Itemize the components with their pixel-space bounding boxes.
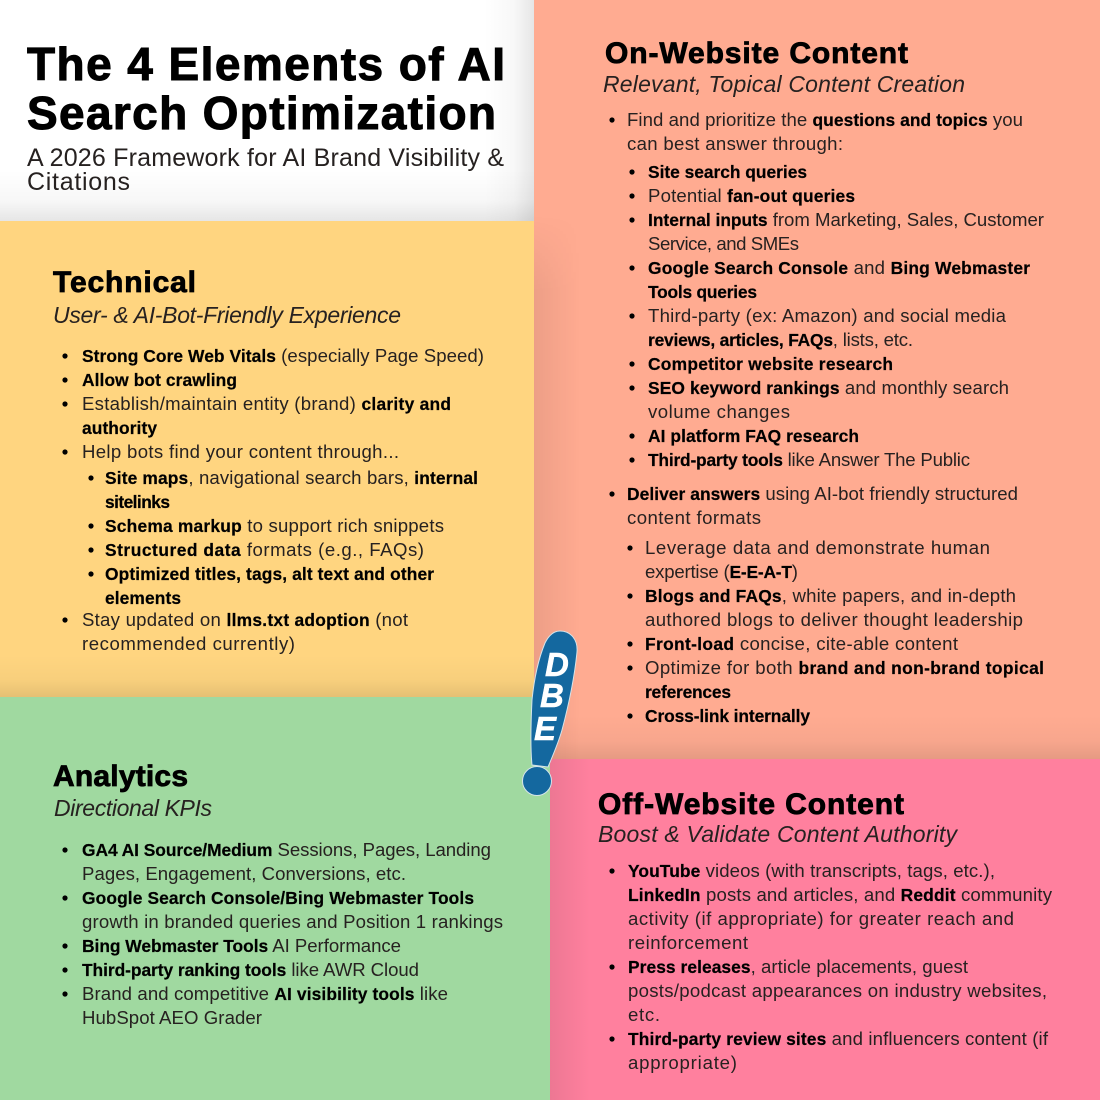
list: analytics: Brand and competitive AI visibility tools like (82, 983, 448, 1004)
heading: technical: Technical (53, 266, 196, 299)
list: questions and topics: Third-party tools like Answer The Public (648, 449, 970, 470)
panel: title block (0, 0, 534, 221)
list: questions and topics: Find and prioritize the questions and topics you (627, 109, 1023, 130)
panel: technical (0, 221, 534, 697)
subtitle: analytics: Directional KPIs (54, 795, 212, 821)
heading: off-website content: Off-Website Content (598, 788, 904, 821)
list: questions and topics: can best answer through: (627, 133, 843, 154)
list: analytics: HubSpot AEO Grader (82, 1007, 262, 1028)
list: questions and topics: Internal inputs from Marketing, Sales, Customer (648, 209, 1044, 230)
list: technical: sitelinks (105, 492, 170, 512)
list: questions and topics: volume changes (648, 401, 790, 422)
title: The 4 Elements of AI (27, 38, 505, 90)
subtitle: Citations (27, 168, 130, 196)
list: off-website content: reinforcement (628, 932, 749, 953)
list: deliver answers: Optimize for both brand and non-brand topical (645, 657, 1044, 678)
list: deliver answers: references (645, 682, 731, 702)
icon: DBE exclamation mark: D (545, 646, 569, 683)
list: technical: Allow bot crawling (82, 370, 237, 390)
list: questions and topics: Competitor website research (648, 354, 893, 374)
title: Search Optimization (27, 87, 496, 139)
list: off-website content: Press releases, article placements, guest (628, 956, 969, 977)
list: questions and topics: Google Search Console and Bing Webmaster (648, 257, 1030, 278)
list: deliver answers: Blogs and FAQs, white papers, and in-depth (645, 585, 1016, 606)
list: questions and topics: reviews, articles, FAQs, lists, etc. (648, 329, 913, 350)
icon: DBE exclamation mark: E (534, 710, 557, 747)
list: technical: Strong Core Web Vitals (especially Page Speed) (82, 345, 484, 366)
icon: DBE exclamation mark (522, 631, 577, 796)
list: off-website content: appropriate) (628, 1052, 737, 1073)
list: technical: Structured data formats (e.g., FAQs) (105, 539, 424, 560)
list: questions and topics: Third-party (ex: Amazon) and social media (648, 305, 1007, 326)
icon: DBE exclamation mark: B (540, 677, 564, 714)
list: analytics (62, 839, 503, 1028)
heading: analytics: Analytics (53, 760, 188, 793)
list: technical: Site maps, navigational search bars, internal (105, 467, 478, 488)
list: off-website content (609, 860, 1053, 1073)
subtitle: technical: User- & AI-Bot-Friendly Experience (53, 302, 401, 328)
list: off-website content: posts/podcast appearances on industry websites, (628, 980, 1047, 1001)
list: analytics: GA4 AI Source/Medium Sessions, Pages, Landing (82, 839, 491, 860)
list: analytics: Pages, Engagement, Conversions, etc. (82, 863, 406, 884)
list: technical: Help bots find your content through... (82, 441, 399, 462)
list: deliver answers: content formats (627, 507, 761, 528)
heading: on-website content: On-Website Content (605, 37, 908, 70)
list: off-website content: YouTube videos (with transcripts, tags, etc.), (628, 860, 995, 881)
list: technical: Stay updated on llms.txt adoption (not (82, 609, 409, 630)
list: off-website content: etc. (628, 1004, 660, 1025)
list: deliver answers (609, 483, 1044, 726)
panel: off-website content (550, 759, 1100, 1100)
list: off-website content: LinkedIn posts and articles, and Reddit community (628, 884, 1053, 905)
list: analytics: Bing Webmaster Tools AI Performance (82, 935, 401, 956)
list: technical: elements (105, 588, 181, 608)
list: questions and topics: Site search queries (648, 162, 807, 182)
list: deliver answers: Leverage data and demonstrate human (645, 537, 990, 558)
list: technical: Optimized titles, tags, alt text and other (105, 564, 434, 584)
list: questions and topics: Potential fan-out queries (648, 185, 855, 206)
panel: analytics (0, 697, 550, 1100)
title (27, 38, 505, 139)
subtitle: on-website content: Relevant, Topical Content Creation (603, 71, 965, 97)
list: questions and topics: Tools queries (648, 282, 757, 302)
list: technical: recommended currently) (82, 633, 295, 654)
panel: on-website content (534, 0, 1100, 759)
list: off-website content: Third-party review sites and influencers content (if (628, 1028, 1049, 1049)
subtitle: A 2026 Framework for AI Brand Visibility & (27, 144, 504, 172)
list: deliver answers: Cross-link internally (645, 706, 810, 726)
list: analytics: growth in branded queries and Position 1 rankings (82, 911, 503, 932)
list: deliver answers: authored blogs to deliver thought leadership (645, 609, 1023, 630)
list: deliver answers: Front-load concise, cite-able content (645, 633, 959, 654)
list: technical: Schema markup to support rich snippets (105, 515, 444, 536)
list: technical (62, 345, 484, 654)
list: questions and topics (609, 109, 1044, 470)
list: deliver answers: expertise (E-E-A-T) (645, 561, 798, 582)
list: technical: authority (82, 418, 157, 438)
list: questions and topics: AI platform FAQ research (648, 426, 859, 446)
list: off-website content: activity (if appropriate) for greater reach and (628, 908, 1014, 929)
list: deliver answers: Deliver answers using AI-bot friendly structured (627, 483, 1018, 504)
list: analytics: Google Search Console/Bing Webmaster Tools (82, 888, 474, 908)
list: questions and topics: SEO keyword rankings and monthly search (648, 377, 1009, 398)
list: analytics: Third-party ranking tools like AWR Cloud (82, 959, 419, 980)
subtitle (27, 144, 504, 196)
list: questions and topics: Service, and SMEs (648, 233, 799, 254)
subtitle: off-website content: Boost & Validate Content Authority (598, 821, 958, 847)
list: technical: Establish/maintain entity (brand) clarity and (82, 393, 451, 414)
